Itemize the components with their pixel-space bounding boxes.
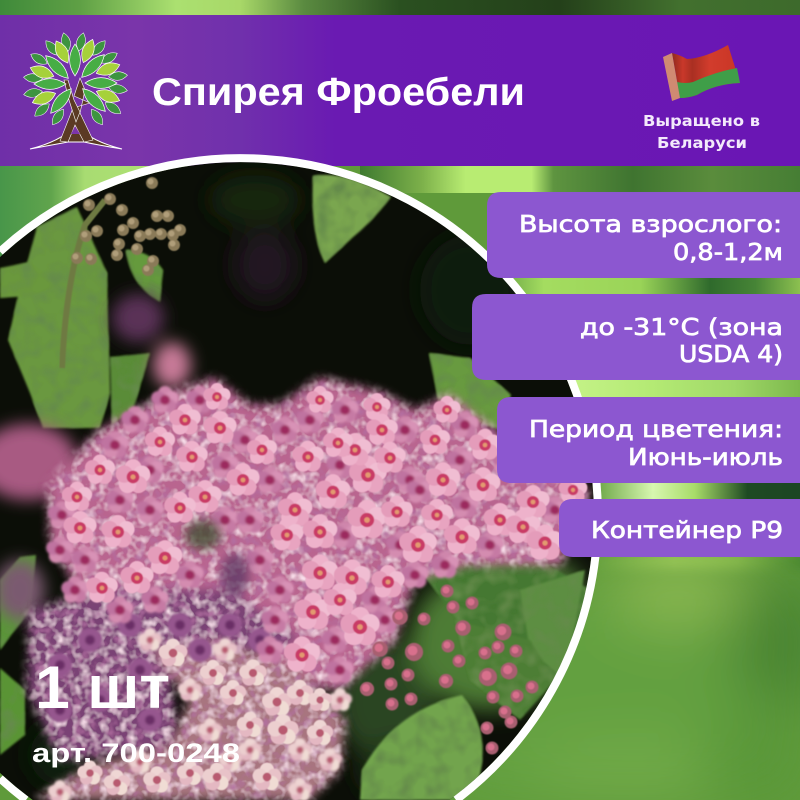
panel: frost hardiness bbox=[472, 294, 800, 380]
panel: frost hardiness: USDA 4) bbox=[679, 340, 783, 368]
label: grown in Belarus bbox=[643, 112, 760, 152]
panel: container bbox=[559, 499, 800, 557]
tree trunk bbox=[30, 78, 122, 149]
main pink flower masses bbox=[48, 378, 590, 690]
panel: height: 0,8-1,2м bbox=[673, 238, 783, 266]
leaves bbox=[0, 175, 590, 800]
panel: height bbox=[487, 192, 800, 278]
panel: flowering period: Июнь-июль bbox=[628, 443, 783, 471]
lower purple bloom bbox=[28, 590, 300, 760]
label: grown in Belarus: Беларуси bbox=[657, 134, 747, 152]
soft shadows between clusters bbox=[185, 520, 249, 597]
flower clusters bbox=[62, 383, 587, 795]
brown buds bbox=[71, 177, 186, 276]
title: Спирея Фроебели bbox=[152, 71, 525, 114]
cream lower bloom bbox=[35, 640, 345, 800]
stem bbox=[62, 200, 105, 368]
panel: height: Высота взрослого: bbox=[519, 210, 782, 238]
blurred pink background blooms bbox=[0, 294, 191, 620]
tree leaves bbox=[23, 32, 128, 127]
logo: tree bbox=[23, 32, 128, 149]
header band bbox=[0, 15, 800, 166]
dim background flowers bbox=[46, 386, 589, 800]
panel: flowering period bbox=[497, 397, 800, 483]
photo circle: spirea flowers bbox=[0, 158, 600, 800]
icon: Belarus flag bbox=[663, 45, 740, 101]
panel: flowering period: Период цветения: bbox=[529, 415, 783, 443]
quantity label: 1 шт bbox=[35, 654, 170, 721]
pink buds bbox=[360, 584, 538, 754]
panel: container: Контейнер Р9 bbox=[591, 516, 783, 544]
panel: frost hardiness: до -31°С (зона bbox=[580, 313, 783, 341]
white ring bbox=[0, 158, 598, 800]
article number: арт. 700-0248 bbox=[32, 738, 240, 768]
label: grown in Belarus: Выращено в bbox=[643, 112, 760, 130]
